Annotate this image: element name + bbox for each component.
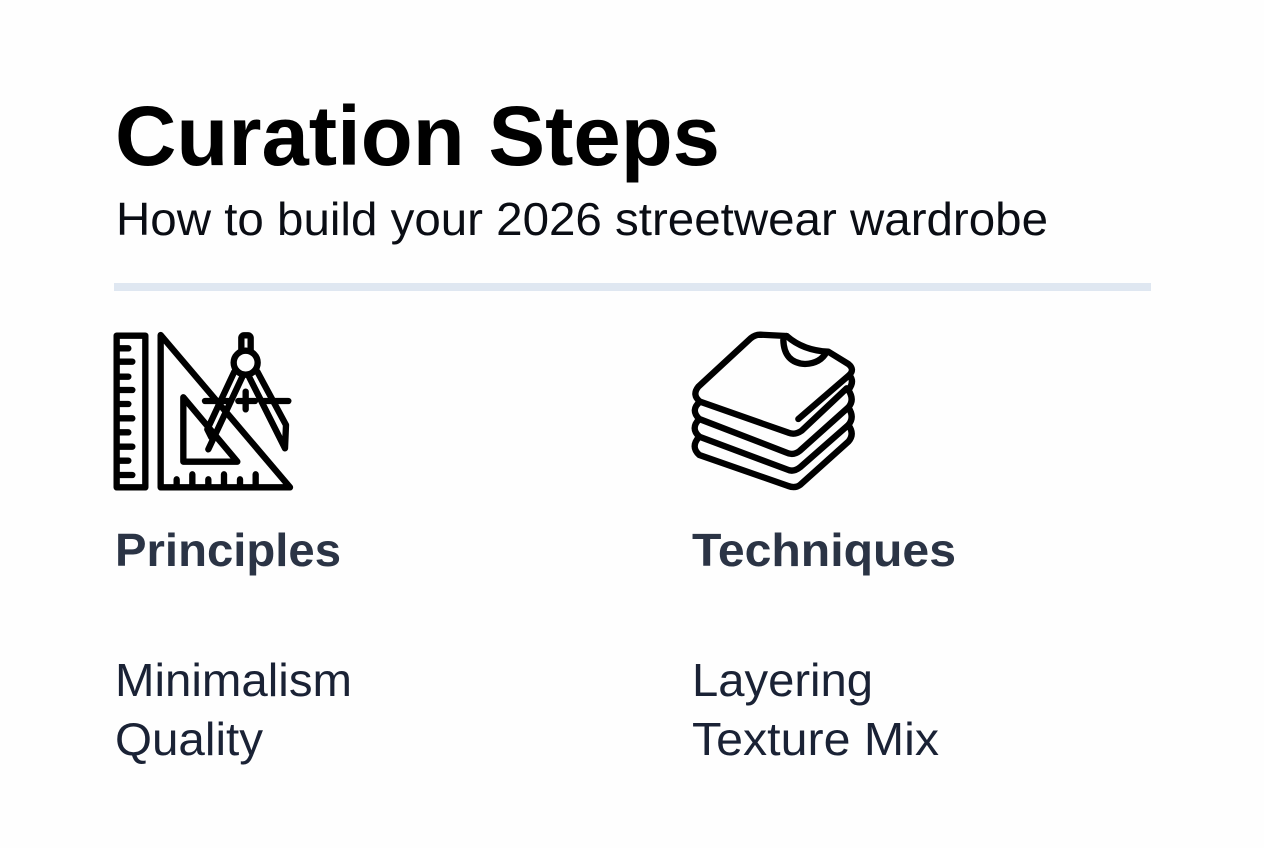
panel: principles — [115, 335, 352, 765]
text: principles list — [115, 654, 352, 765]
icon: stack of folded t-shirts — [695, 335, 852, 487]
panel: techniques — [692, 335, 956, 765]
icon: ruler, set square and compass — [117, 335, 290, 487]
title: Curation Steps — [115, 89, 720, 183]
heading: principles: Principles — [115, 524, 341, 576]
heading: techniques: Techniques — [692, 524, 956, 576]
subtitle: How to build your 2026 streetwear wardrobe — [116, 193, 1048, 245]
text: techniques list — [692, 654, 939, 765]
text: techniques list: Texture Mix — [692, 713, 939, 765]
text: principles list: Quality — [115, 713, 263, 765]
text: principles list: Minimalism — [115, 654, 352, 706]
text: techniques list: Layering — [692, 654, 873, 706]
